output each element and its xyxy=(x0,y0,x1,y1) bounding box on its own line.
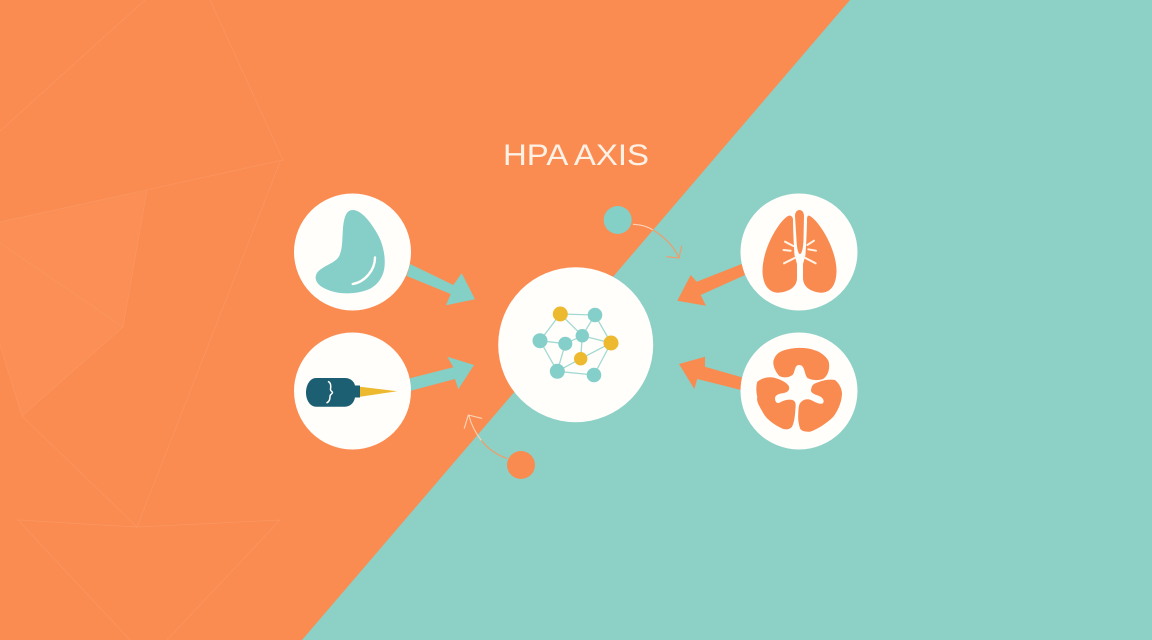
icon: left lobe xyxy=(756,377,796,429)
icon: white bracket mark xyxy=(327,382,332,403)
icon: kidney highlight xyxy=(353,258,375,284)
panel: lungs icon xyxy=(740,194,858,310)
network nodes xyxy=(532,306,618,382)
icon: teal dot xyxy=(604,206,632,234)
arrow: bottle to centre xyxy=(410,357,474,391)
icon: bronchi branches xyxy=(784,241,816,263)
panel: kidney icon xyxy=(294,194,411,310)
title: HPA AXIS xyxy=(503,139,649,172)
curved arrow: teal dot to lungs side xyxy=(633,224,682,258)
icon: left lung xyxy=(762,216,797,293)
network links xyxy=(540,314,611,375)
curved arrow: orange dot to bottle side xyxy=(464,415,507,458)
icon: bottle body xyxy=(306,378,360,407)
arrow: kidney to centre xyxy=(407,264,475,305)
arrow: lungs to centre xyxy=(677,264,745,306)
teal diagonal panel xyxy=(302,0,1152,640)
panel: bottle icon xyxy=(294,332,411,450)
icon: trachea xyxy=(795,210,804,254)
icon: right lobe xyxy=(798,380,842,432)
icon: kidney shape xyxy=(316,210,385,293)
faint geometric background pattern xyxy=(0,0,283,640)
icon: right lung xyxy=(803,216,837,293)
icon: yellow tip xyxy=(360,387,397,397)
arrow: lobed organ to centre xyxy=(679,357,742,390)
icon: top lobe xyxy=(773,348,829,380)
icon: orange dot xyxy=(507,451,535,479)
panel: central network circle xyxy=(498,267,653,422)
panel: lobed organ icon xyxy=(740,332,858,450)
